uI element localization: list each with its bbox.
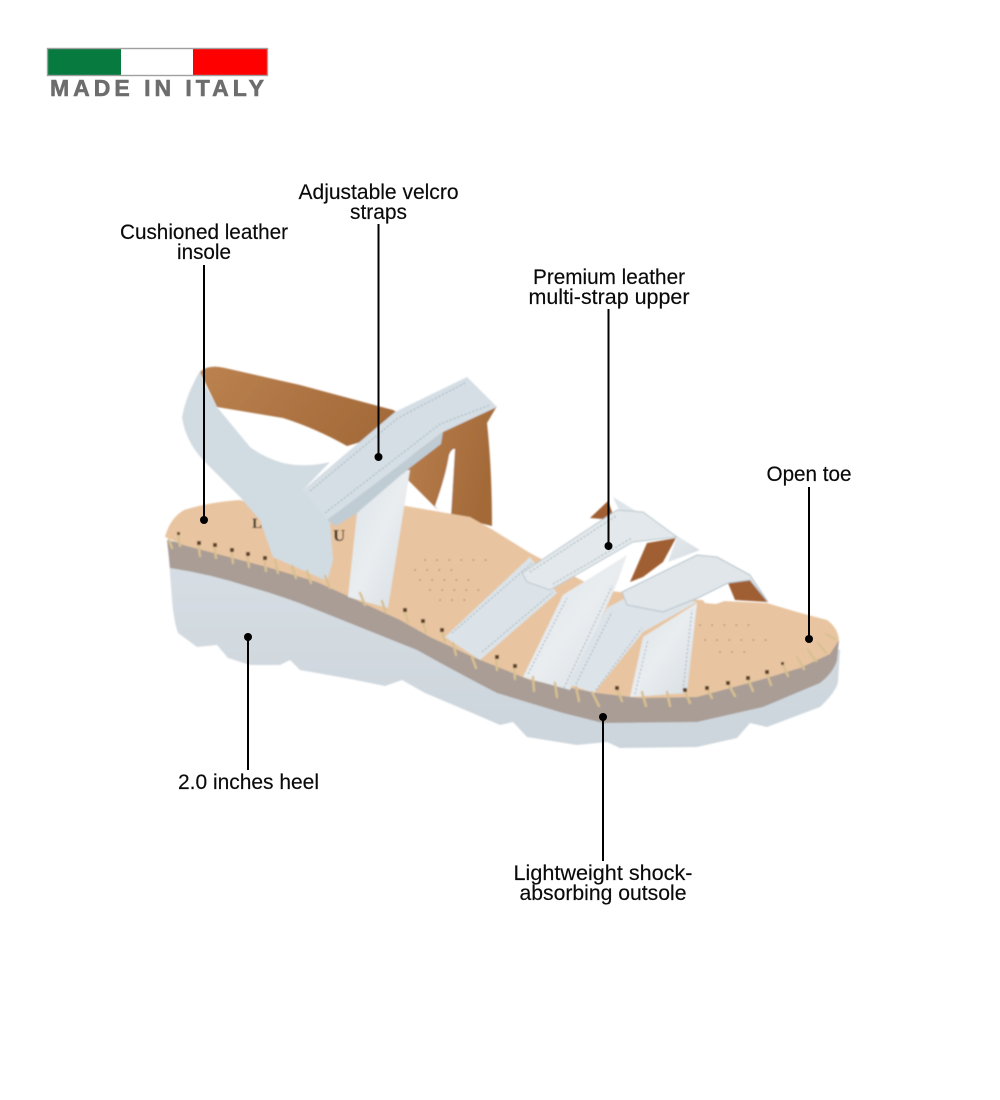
strap stitching — [452, 516, 692, 694]
callout: outsole: Lightweight shock- — [514, 862, 692, 885]
illustration: sandal — [165, 367, 840, 748]
callout: premium leather multi-strap upper: multi-strap upper — [528, 286, 690, 309]
strap C base — [568, 590, 697, 693]
silver strap B — [523, 555, 627, 690]
callout: cushioned leather insole — [120, 221, 288, 524]
callout: heel height — [178, 633, 319, 794]
velcro strap A — [522, 510, 677, 590]
logo: made in Italy — [48, 48, 268, 101]
insole brand letters: L — [252, 516, 262, 532]
callout: open toe: Open toe — [766, 463, 852, 486]
heel strap — [182, 371, 333, 581]
callout: adjustable velcro straps: Adjustable velcro — [298, 181, 458, 204]
logo caption: MADE IN ITALY — [50, 75, 264, 101]
callout: adjustable velcro straps — [298, 181, 458, 461]
callout: cushioned leather insole: insole — [177, 241, 231, 264]
silver strap D — [630, 603, 697, 697]
flag: Italian tricolour — [48, 48, 268, 76]
midsole — [167, 540, 839, 723]
callout: cushioned leather insole: Cushioned leather — [120, 221, 288, 244]
gap in strap post — [435, 449, 455, 517]
strap A base — [445, 557, 557, 660]
callout: heel height: 2.0 inches heel — [178, 771, 319, 794]
outsole — [169, 560, 840, 748]
insole — [165, 500, 839, 698]
brown strap interior — [590, 501, 768, 602]
insole brand letters: U — [333, 526, 345, 545]
insole brand letters — [252, 516, 345, 545]
silver rear strap — [348, 470, 410, 608]
velcro ankle strap — [303, 377, 497, 526]
callout: premium leather multi-strap upper: Premium leather — [533, 266, 685, 289]
callout: adjustable velcro straps: straps — [350, 201, 407, 224]
stitching — [169, 532, 835, 706]
callout: premium leather multi-strap upper — [528, 266, 690, 550]
callout: outsole — [514, 713, 692, 905]
silver toe strap behind — [613, 497, 700, 562]
insole perforations — [415, 560, 770, 652]
callout: outsole: absorbing outsole — [520, 882, 686, 905]
inner strap post — [398, 406, 497, 526]
sling back lining — [200, 367, 420, 446]
callout: open toe — [766, 463, 852, 643]
velcro strap C — [622, 555, 768, 612]
gap between straps — [619, 543, 727, 604]
